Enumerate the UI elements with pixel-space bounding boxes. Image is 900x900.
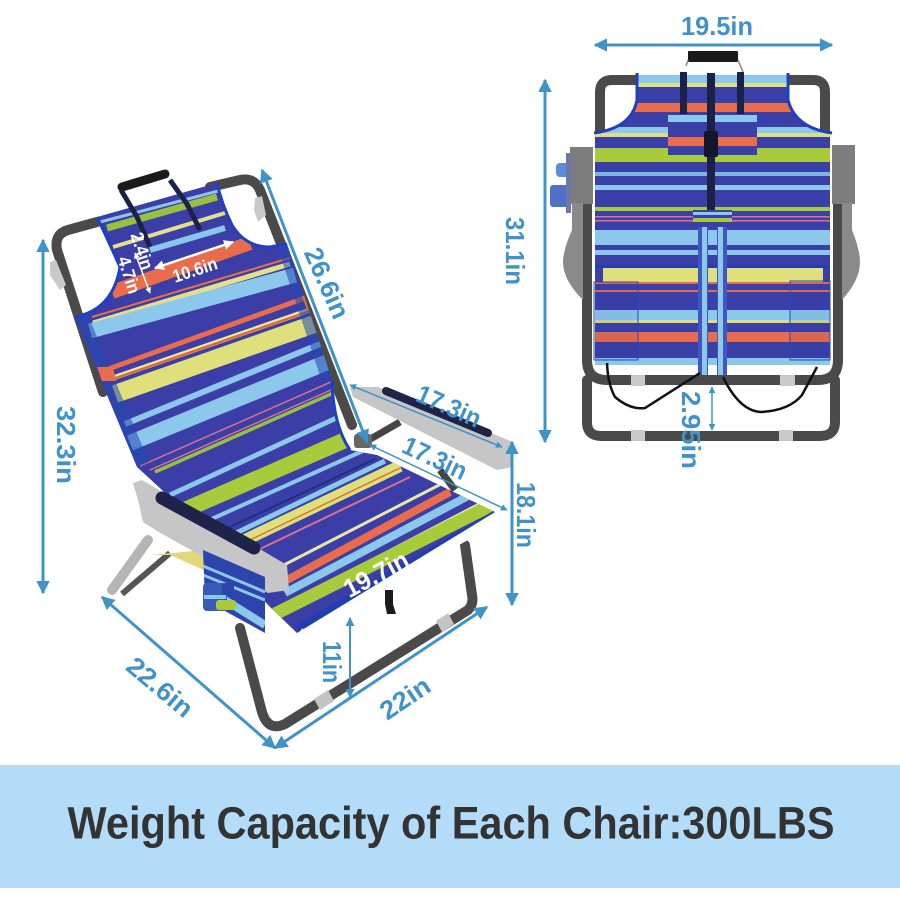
front legs frame	[240, 545, 472, 726]
striped fabric	[75, 183, 495, 633]
dimension: 31.1in: 31.1in	[500, 217, 530, 285]
dimension: 26.6in	[262, 170, 367, 442]
dimension: 22.6in: 22.6in	[120, 650, 200, 724]
dimension: 11in	[317, 618, 350, 697]
banner text: Weight Capacity of Each Chair:300LBS	[68, 798, 834, 848]
side arm left	[563, 147, 593, 300]
side edge bands	[75, 244, 332, 467]
seat frame	[587, 205, 838, 380]
right chair: back view	[550, 51, 860, 441]
cup holder	[203, 583, 236, 611]
fabric binding	[75, 183, 350, 450]
back rest frame	[600, 80, 825, 135]
cup holder back view	[550, 153, 571, 213]
dimension: 22in	[275, 607, 487, 748]
dimension: 22in: 22in	[374, 670, 436, 726]
leg clips	[314, 613, 454, 710]
black shoulder straps	[607, 363, 817, 412]
hanging straps	[698, 227, 727, 375]
dimension: 17.3in armrest	[350, 378, 502, 447]
buckle	[385, 590, 396, 614]
dimension: 4.7in pillow: 4.7in	[114, 254, 144, 296]
dimension: 19.7in	[297, 520, 500, 637]
dimension: 26.6in: 26.6in	[298, 243, 356, 323]
pillow	[668, 115, 757, 155]
dimension: 17.3in seat: 17.3in	[398, 430, 472, 486]
carry handle	[686, 51, 743, 72]
frame clips	[631, 375, 795, 441]
back frame right side	[210, 179, 352, 425]
striped fabric	[590, 70, 835, 370]
fabric binding	[594, 73, 832, 133]
dimension: 11in: 11in	[317, 641, 347, 683]
dimension: 2.95in: 2.95in	[676, 391, 706, 469]
dimension: 32.3in: 32.3in	[51, 406, 81, 484]
dimension: 17.3in armrest: 17.3in	[412, 378, 486, 434]
dimension: 19.7in: 19.7in	[338, 544, 414, 604]
dimension: 2.4in pillow: 2.4in	[127, 230, 157, 272]
right pocket	[790, 281, 830, 360]
side straps	[680, 72, 744, 114]
side pocket	[203, 550, 265, 633]
back leg	[112, 540, 215, 594]
left chair: side view	[50, 170, 513, 726]
dimension: 22.6in	[102, 597, 275, 748]
dimension: 18.1in: 18.1in	[511, 482, 541, 548]
hinge and rear strut	[354, 422, 455, 490]
back frame	[56, 222, 103, 392]
left pocket	[594, 282, 638, 360]
dimension: 10.6in pillow	[155, 242, 233, 287]
centre strap and buckle	[704, 73, 718, 211]
carry handle	[121, 174, 200, 247]
dimension: 10.6in pillow: 10.6in	[170, 253, 220, 287]
dimension: 19.5in: 19.5in	[681, 11, 753, 41]
bottom banner	[0, 765, 900, 888]
right armrest	[350, 387, 513, 470]
side arm right	[832, 145, 860, 300]
lower outer frame	[587, 380, 835, 436]
left armrest	[133, 480, 289, 593]
dimension: 17.3in seat	[370, 430, 507, 510]
frame clips	[50, 196, 266, 290]
striped tab	[693, 210, 732, 227]
